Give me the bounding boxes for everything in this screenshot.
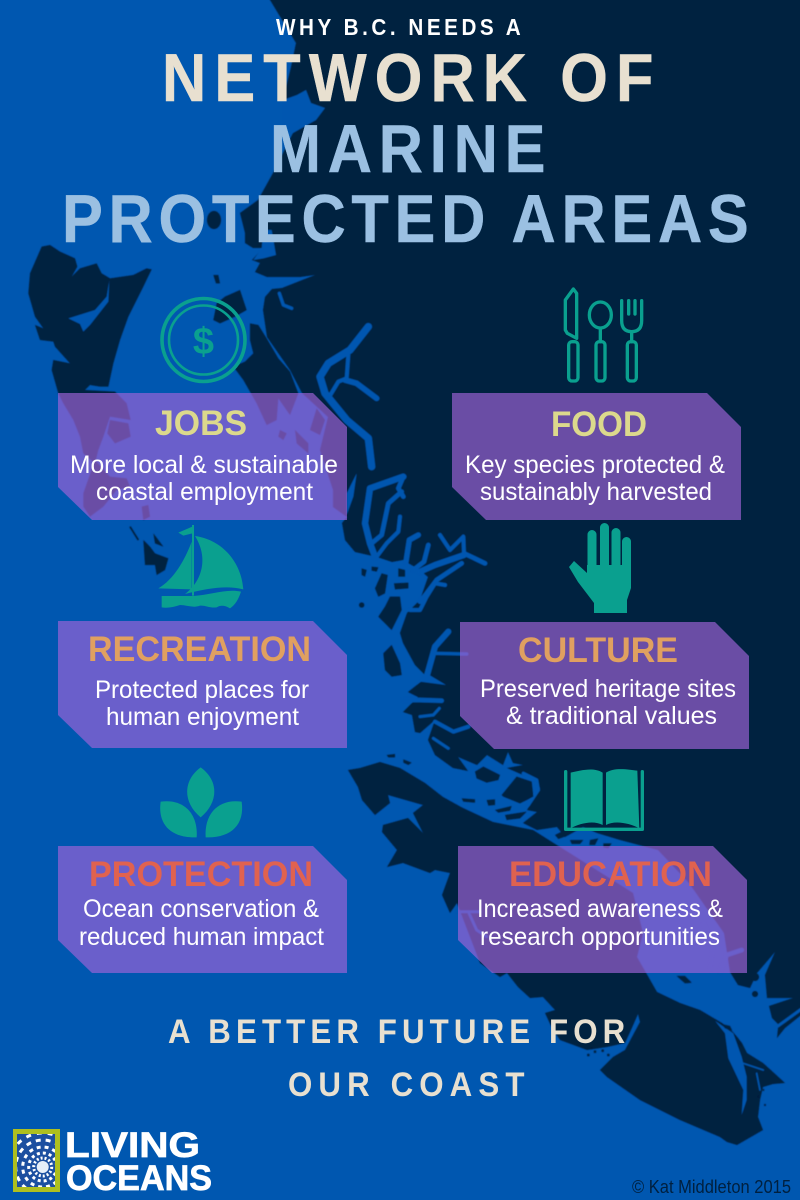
- logo: Living Oceans: [13, 1129, 211, 1192]
- icon: open hand: [569, 528, 631, 613]
- text: jobs description: [70, 451, 338, 506]
- logo wordmark: OCEANS: [66, 1159, 212, 1198]
- north coast inlets: [347, 473, 485, 630]
- heading: food: FOOD: [551, 405, 647, 444]
- text: protection description: reduced human impact: [79, 923, 324, 951]
- icon: dollar coin: [162, 298, 245, 382]
- panel: recreation: [58, 621, 347, 748]
- text: food description: sustainably harvested: [480, 478, 712, 506]
- text: food description: Key species protected &: [465, 451, 725, 479]
- icon: sailboat: [158, 525, 243, 608]
- heading: culture: CULTURE: [518, 631, 678, 670]
- text: recreation description: human enjoyment: [106, 703, 299, 731]
- mid-coast islands: [213, 275, 220, 283]
- text: recreation description: Protected places for: [95, 676, 309, 704]
- text: protection description: [79, 895, 324, 951]
- panel: jobs: [58, 393, 347, 520]
- text: culture description: & traditional values: [506, 702, 717, 730]
- heading: jobs: JOBS: [155, 404, 247, 443]
- closing message: A BETTER FUTURE FOR: [168, 1012, 625, 1050]
- title line 2: MARINE: [270, 110, 545, 187]
- panel: culture: [460, 622, 749, 749]
- text: food description: [465, 451, 725, 506]
- title line 3: PROTECTED AREAS: [62, 180, 749, 257]
- closing message: [168, 1012, 625, 1103]
- logo wordmark: [65, 1126, 212, 1198]
- icon: dollar coin: $: [193, 321, 214, 363]
- mainland channels: [253, 230, 276, 260]
- title line 1: NETWORK OF: [162, 39, 653, 116]
- icon: open book: [566, 769, 642, 829]
- south coast details: [587, 923, 766, 1115]
- Vancouver Island: [348, 762, 785, 1145]
- heading: protection: PROTECTION: [89, 855, 313, 894]
- text: jobs description: coastal employment: [96, 478, 313, 506]
- text: education description: [477, 895, 723, 951]
- panel: education: [458, 846, 747, 973]
- central coast channels: [383, 632, 612, 937]
- Queen Charlotte southern rocks: [130, 527, 168, 575]
- Haida Gwaii: [28, 230, 377, 520]
- heading: education: EDUCATION: [509, 855, 712, 894]
- icon: three leaves: [160, 767, 242, 837]
- closing message: OUR COAST: [288, 1065, 524, 1103]
- panel: protection: [58, 846, 347, 973]
- text: education description: research opportunities: [480, 923, 720, 951]
- text: culture description: Preserved heritage sites: [480, 675, 736, 703]
- title kicker: WHY B.C. NEEDS A: [276, 14, 521, 40]
- icon: knife fork spoon: [565, 289, 642, 381]
- heading: recreation: RECREATION: [88, 630, 311, 669]
- text: protection description: Ocean conservation &: [83, 895, 319, 923]
- text: recreation description: [95, 676, 309, 731]
- text: education description: Increased awareness &: [477, 895, 723, 923]
- mainland: [240, 0, 800, 1024]
- panel: food: [452, 393, 741, 520]
- text: jobs description: More local & sustainable: [70, 451, 338, 479]
- logo wordmark: LIVING: [65, 1126, 200, 1165]
- text: culture description: [480, 675, 736, 730]
- title block: [62, 14, 749, 257]
- logo emblem: [13, 1129, 60, 1192]
